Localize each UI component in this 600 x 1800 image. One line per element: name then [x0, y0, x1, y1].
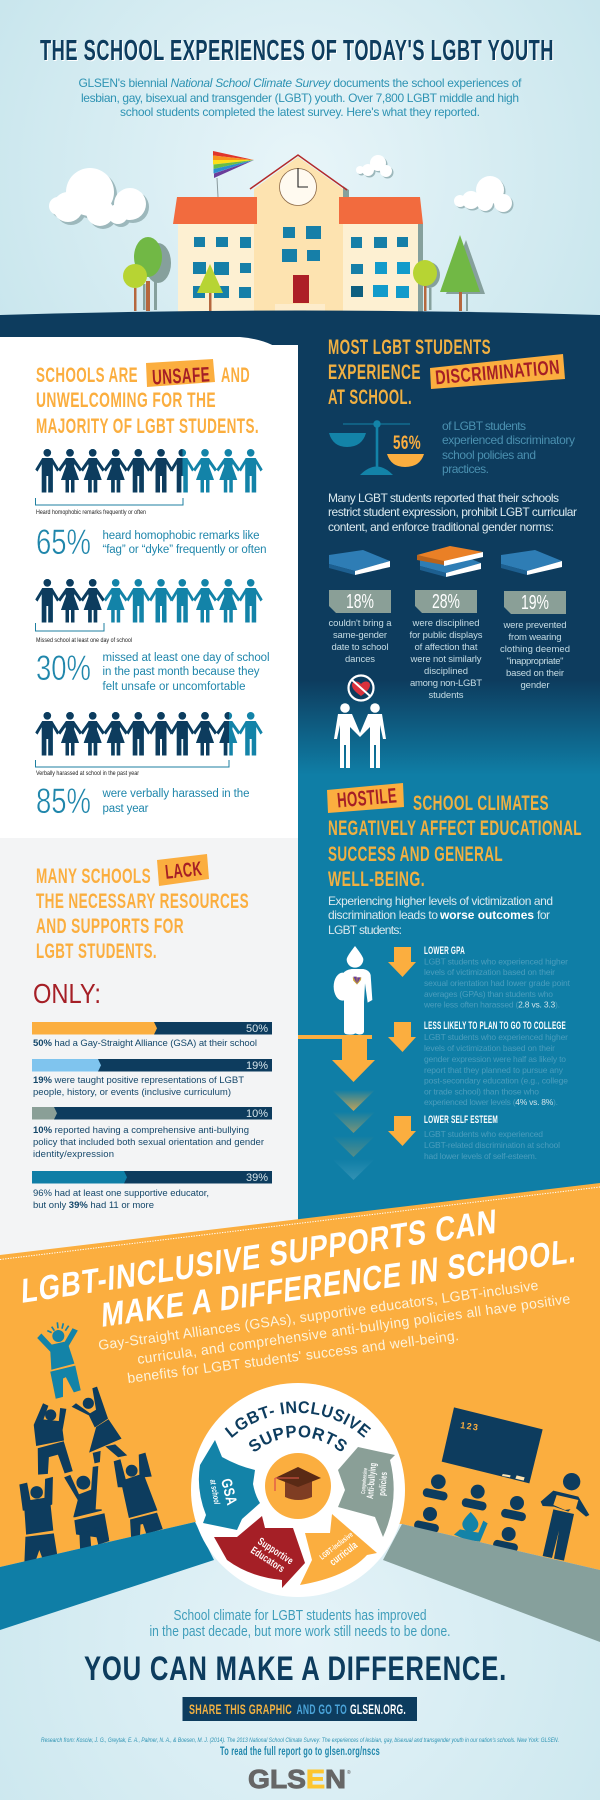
panel: schools are unsafe	[0, 337, 272, 814]
bar 39%: but only 39% had 11 or more	[33, 1200, 154, 1211]
stat 19%: based on their	[506, 668, 564, 679]
stat 30%	[36, 649, 270, 693]
stat 65%: “fag” or “dyke” frequently or often	[102, 544, 266, 556]
text: restrict expression: Many LGBT students reported that their schools	[328, 491, 559, 505]
only label: ONLY:	[33, 978, 101, 1009]
heading: discrimination: EXPERIENCE	[328, 361, 421, 384]
block: lower self esteem: LOWER SELF ESTEEM	[424, 1114, 498, 1126]
heading: hostile: WELL-BEING.	[328, 868, 425, 891]
intro text: school students completed the latest survey. Here's what they reported.	[120, 105, 480, 119]
stat 28%: among non-LGBT	[410, 678, 482, 689]
trees	[123, 235, 485, 311]
call to action: SHARE THIS GRAPHIC	[189, 1701, 292, 1717]
stat 18%: date to school	[332, 642, 388, 653]
clouds	[49, 155, 514, 229]
fading arrows	[332, 1090, 375, 1180]
icon: books	[329, 546, 562, 577]
block: less likely college	[388, 1020, 568, 1107]
bar 19%: 19%	[246, 1060, 268, 1072]
block: less likely college: gender expression were half as likely to	[424, 1054, 566, 1064]
icon: scale 56%	[329, 420, 424, 475]
stat 19%: were prevented	[502, 620, 566, 631]
bar 19%: 19% were taught positive representations of LGBT	[33, 1075, 244, 1086]
rainbow flag	[213, 151, 254, 197]
block: lower GPA: levels of victimization based on their	[424, 967, 555, 977]
icon: classroom	[413, 1407, 589, 1561]
text: benefits: Gay-Straight Alliances (GSAs), supportive educators, LGBT-inclusive	[97, 1277, 540, 1353]
block: lower GPA	[388, 945, 571, 1010]
stat 65%	[36, 523, 266, 562]
bar 39%	[32, 1171, 272, 1211]
students	[413, 1474, 527, 1553]
call to action: AND GO TO	[296, 1701, 347, 1717]
intro text	[78, 76, 522, 119]
bar 10%	[32, 1107, 272, 1160]
block: less likely college: experienced lower levels (4% vs. 8%).	[424, 1097, 558, 1107]
caption 65%: Heard homophobic remarks frequently or often	[36, 509, 146, 516]
text: worse outcomes: for	[537, 908, 550, 922]
bar 39%: 96% had at least one supportive educator,	[33, 1188, 209, 1199]
arrow: GSA: at school	[208, 1479, 222, 1505]
heading: hostile: HOSTILE	[336, 784, 398, 812]
arrow: LGBT-inclusive curricula	[300, 1514, 377, 1585]
stat 18%: dances	[345, 654, 375, 665]
caption 30%: Missed school at least one day of school	[36, 637, 132, 644]
heading: lack: AND SUPPORTS FOR	[36, 915, 184, 938]
people row 30%	[35, 579, 263, 631]
arrow: anti-bullying policies: Anti-bullying	[365, 1462, 379, 1499]
stat 65%: heard homophobic remarks like	[102, 530, 260, 542]
block: less likely college: LGBT students who experienced higher	[424, 1032, 568, 1042]
bar 10%: 10% reported having a comprehensive anti-bullying	[33, 1125, 249, 1136]
icon: no heart	[348, 676, 374, 700]
text: worse outcomes	[328, 894, 553, 937]
stat 18%: 18%	[346, 591, 374, 613]
stat 28%	[410, 590, 483, 701]
stat 28%: disciplined	[424, 666, 468, 677]
arrow: anti-bullying policies: policies	[377, 1471, 390, 1496]
stat 19%: "inappropriate"	[506, 656, 564, 667]
stat 19%: 19%	[521, 592, 549, 614]
stat 19%: clothing deemed	[500, 644, 570, 655]
stat 18%: couldn't bring a	[328, 618, 392, 629]
text: worse outcomes: discrimination leads to	[328, 908, 438, 922]
heading: supports make a difference: LGBT-INCLUSIVE SUPPORTS CAN	[21, 1203, 498, 1311]
call to action	[182, 1697, 417, 1721]
stat 30%: in the past month because they	[102, 666, 260, 678]
stat 85%: 85%	[36, 782, 91, 821]
heading: unsafe: MAJORITY OF LGBT STUDENTS.	[36, 415, 259, 438]
text 56%: practices.	[442, 462, 489, 476]
text: worse outcomes: worse outcomes	[439, 908, 534, 922]
text: benefits	[97, 1277, 571, 1386]
panel: discrimination	[328, 336, 577, 768]
icon: couple holding hands	[334, 703, 386, 768]
heading: lack: MANY SCHOOLS	[36, 865, 151, 888]
arrow: anti-bullying policies: Comprehensive	[361, 1467, 369, 1494]
sky background	[0, 0, 600, 330]
text: restrict expression: restrict student expression, prohibit LGBT curricular	[328, 505, 577, 519]
arrow: supportive educators: Educators	[248, 1544, 287, 1575]
panel: right column background	[298, 330, 600, 1260]
GLSEN logo: ®	[347, 1769, 351, 1776]
stat 30%: felt unsafe or uncomfortable	[102, 681, 246, 693]
text: school climate improved	[150, 1607, 450, 1640]
GLSEN logo	[248, 1764, 351, 1794]
stat 30%: 30%	[36, 649, 91, 688]
heading: discrimination: MOST LGBT STUDENTS	[328, 336, 491, 359]
teacher	[541, 1473, 589, 1561]
text: benefits: curricula, and comprehensive anti-bullying policies all have positive	[136, 1290, 571, 1367]
panel: hostile climates	[298, 783, 582, 1180]
stat 19%: from wearing	[508, 632, 562, 643]
block: lower self esteem: had lower levels of self-esteem.	[424, 1151, 537, 1161]
stat 18%	[328, 590, 392, 665]
block: lower GPA: averages (GPAs) than students who	[424, 989, 553, 999]
arrow: GSA	[199, 1440, 260, 1530]
arrow: supportive educators: Supportive	[255, 1535, 295, 1567]
arrow: supportive educators	[214, 1516, 305, 1588]
arrow: LGBT-inclusive curricula: curricula	[327, 1539, 360, 1568]
arrow: LGBT-inclusive curricula: LGBT-inclusive	[318, 1530, 355, 1562]
text: benefits: benefits for LGBT students' success and well-being.	[126, 1327, 460, 1386]
heading: unsafe: UNWELCOMING FOR THE	[36, 389, 216, 412]
text: school climate improved: in the past decade, but more work still needs to be done.	[150, 1623, 450, 1640]
text: school climate improved: School climate for LGBT students has improved	[174, 1607, 426, 1624]
platform and down arrow	[298, 1035, 375, 1082]
block: less likely college: report that they planned to pursue any	[424, 1065, 564, 1075]
bar 10%: 10%	[246, 1108, 268, 1120]
ground band	[0, 310, 600, 345]
heading: lack	[36, 854, 249, 963]
block: lower GPA: sexual orientation had lower grade point	[424, 978, 571, 988]
icon: human pyramid	[20, 1322, 162, 1562]
stat 30%: missed at least one day of school	[102, 652, 270, 664]
panel: orange supports section	[0, 1183, 600, 1570]
icon: scale 56%: 56%	[393, 433, 421, 454]
wheel: LGBT-inclusive supports	[191, 1383, 405, 1597]
wheel: LGBT-inclusive supports: SUPPORTS	[249, 1426, 347, 1452]
heading: unsafe: UNSAFE	[152, 363, 211, 389]
wheel heading: LGBT- INCLUSIVE	[224, 1401, 371, 1438]
bar 50%: 50% had a Gay-Straight Alliance (GSA) at their school	[33, 1038, 257, 1049]
arrow: anti-bullying policies	[338, 1447, 395, 1537]
GLSEN logo: GLS	[248, 1764, 306, 1794]
heading: hostile: SUCCESS AND GENERAL	[328, 843, 503, 866]
bar 39%: 39%	[246, 1172, 268, 1184]
text: restrict expression: content, and enforce traditional gender norms:	[328, 520, 554, 534]
stat 85%: were verbally harassed in the	[102, 788, 250, 800]
stat 28%: students	[428, 690, 464, 701]
block: lower GPA: were less often harassed (2.8 vs. 3.3).	[423, 1000, 560, 1010]
heading: discrimination	[328, 336, 565, 409]
heading: unsafe: SCHOOLS ARE	[36, 364, 138, 387]
panel: lack of resources	[0, 838, 298, 1260]
heading: unsafe: AND	[221, 364, 250, 387]
stat 19%	[500, 591, 570, 691]
block: less likely college: or trade school) than those who	[424, 1086, 539, 1096]
block: lower self esteem	[388, 1114, 560, 1161]
blackboard	[442, 1407, 543, 1483]
block: lower GPA: LGBT students who experienced higher	[424, 956, 568, 966]
stat 28%: were not similarly	[410, 654, 482, 665]
call to action: GLSEN.ORG.	[350, 1701, 406, 1717]
bar 19%	[32, 1059, 272, 1098]
stat 85%	[36, 782, 250, 821]
raised hand student	[454, 1512, 488, 1542]
heading: lack: LGBT STUDENTS.	[36, 940, 157, 963]
block: less likely college: levels of victimization based on their	[424, 1043, 555, 1053]
icon: student figure	[334, 946, 372, 1035]
stat 28%: 28%	[432, 591, 460, 613]
heading: hostile	[327, 783, 582, 891]
text: worse outcomes: Experiencing higher levels of victimization and	[328, 894, 553, 908]
stat 18%: same-gender	[333, 630, 387, 641]
stat 19%: gender	[520, 680, 550, 691]
blackboard: 123	[460, 1420, 480, 1433]
text 56%: of LGBT students	[442, 419, 526, 433]
intro text: GLSEN's biennial National School Climate Survey documents the school experiences of	[78, 76, 522, 90]
text 56%: school policies and	[442, 448, 536, 462]
stat 28%: for public displays	[410, 630, 483, 641]
arrow: GSA: GSA	[217, 1477, 240, 1507]
block: lower GPA: LOWER GPA	[424, 945, 465, 957]
stat 28%: of affection that	[414, 642, 478, 653]
graduation cap	[265, 1453, 331, 1519]
GLSEN logo: E	[306, 1764, 325, 1794]
block: lower self esteem: LGBT-related discrimination at school	[424, 1140, 560, 1150]
text: worse outcomes: LGBT students:	[328, 923, 402, 937]
bar 50%: 50%	[246, 1023, 268, 1035]
text 56%	[442, 419, 575, 476]
heading: unsafe	[36, 359, 259, 438]
school building	[173, 155, 423, 312]
text 56%: experienced discriminatory	[442, 433, 575, 447]
caption 85%: Verbally harassed at school in the past year	[36, 770, 140, 777]
ribbon bands	[0, 1522, 600, 1642]
heading: discrimination: AT SCHOOL.	[328, 386, 412, 409]
stat 28%: were disciplined	[412, 618, 480, 629]
GLSEN logo: N	[325, 1764, 346, 1794]
bar 10%: identity/expression	[33, 1149, 114, 1160]
bar 19%: people, history, or events (inclusive curriculum)	[33, 1087, 231, 1098]
bar 50%	[32, 1022, 272, 1049]
clock	[280, 168, 316, 206]
heading: lack: THE NECESSARY RESOURCES	[36, 890, 249, 913]
stat 85%: past year	[102, 803, 149, 815]
people row 65%	[35, 449, 263, 505]
block: lower self esteem: LGBT students who experienced	[424, 1129, 543, 1139]
bar 10%: policy that included both sexual orientation and gender	[33, 1137, 264, 1148]
bottom sky	[0, 1500, 600, 1800]
text: restrict expression	[328, 491, 577, 534]
heading: lack: LACK	[164, 858, 203, 884]
intro text: lesbian, gay, bisexual and transgender (LGBT) youth. Over 7,800 LGBT middle and high	[81, 91, 519, 105]
block: less likely college: post-secondary education (e.g., college	[424, 1076, 568, 1086]
stat 65%: 65%	[36, 523, 91, 562]
people row 85%	[35, 712, 263, 767]
report link: To read the full report go to glsen.org/nscs	[220, 1746, 380, 1758]
